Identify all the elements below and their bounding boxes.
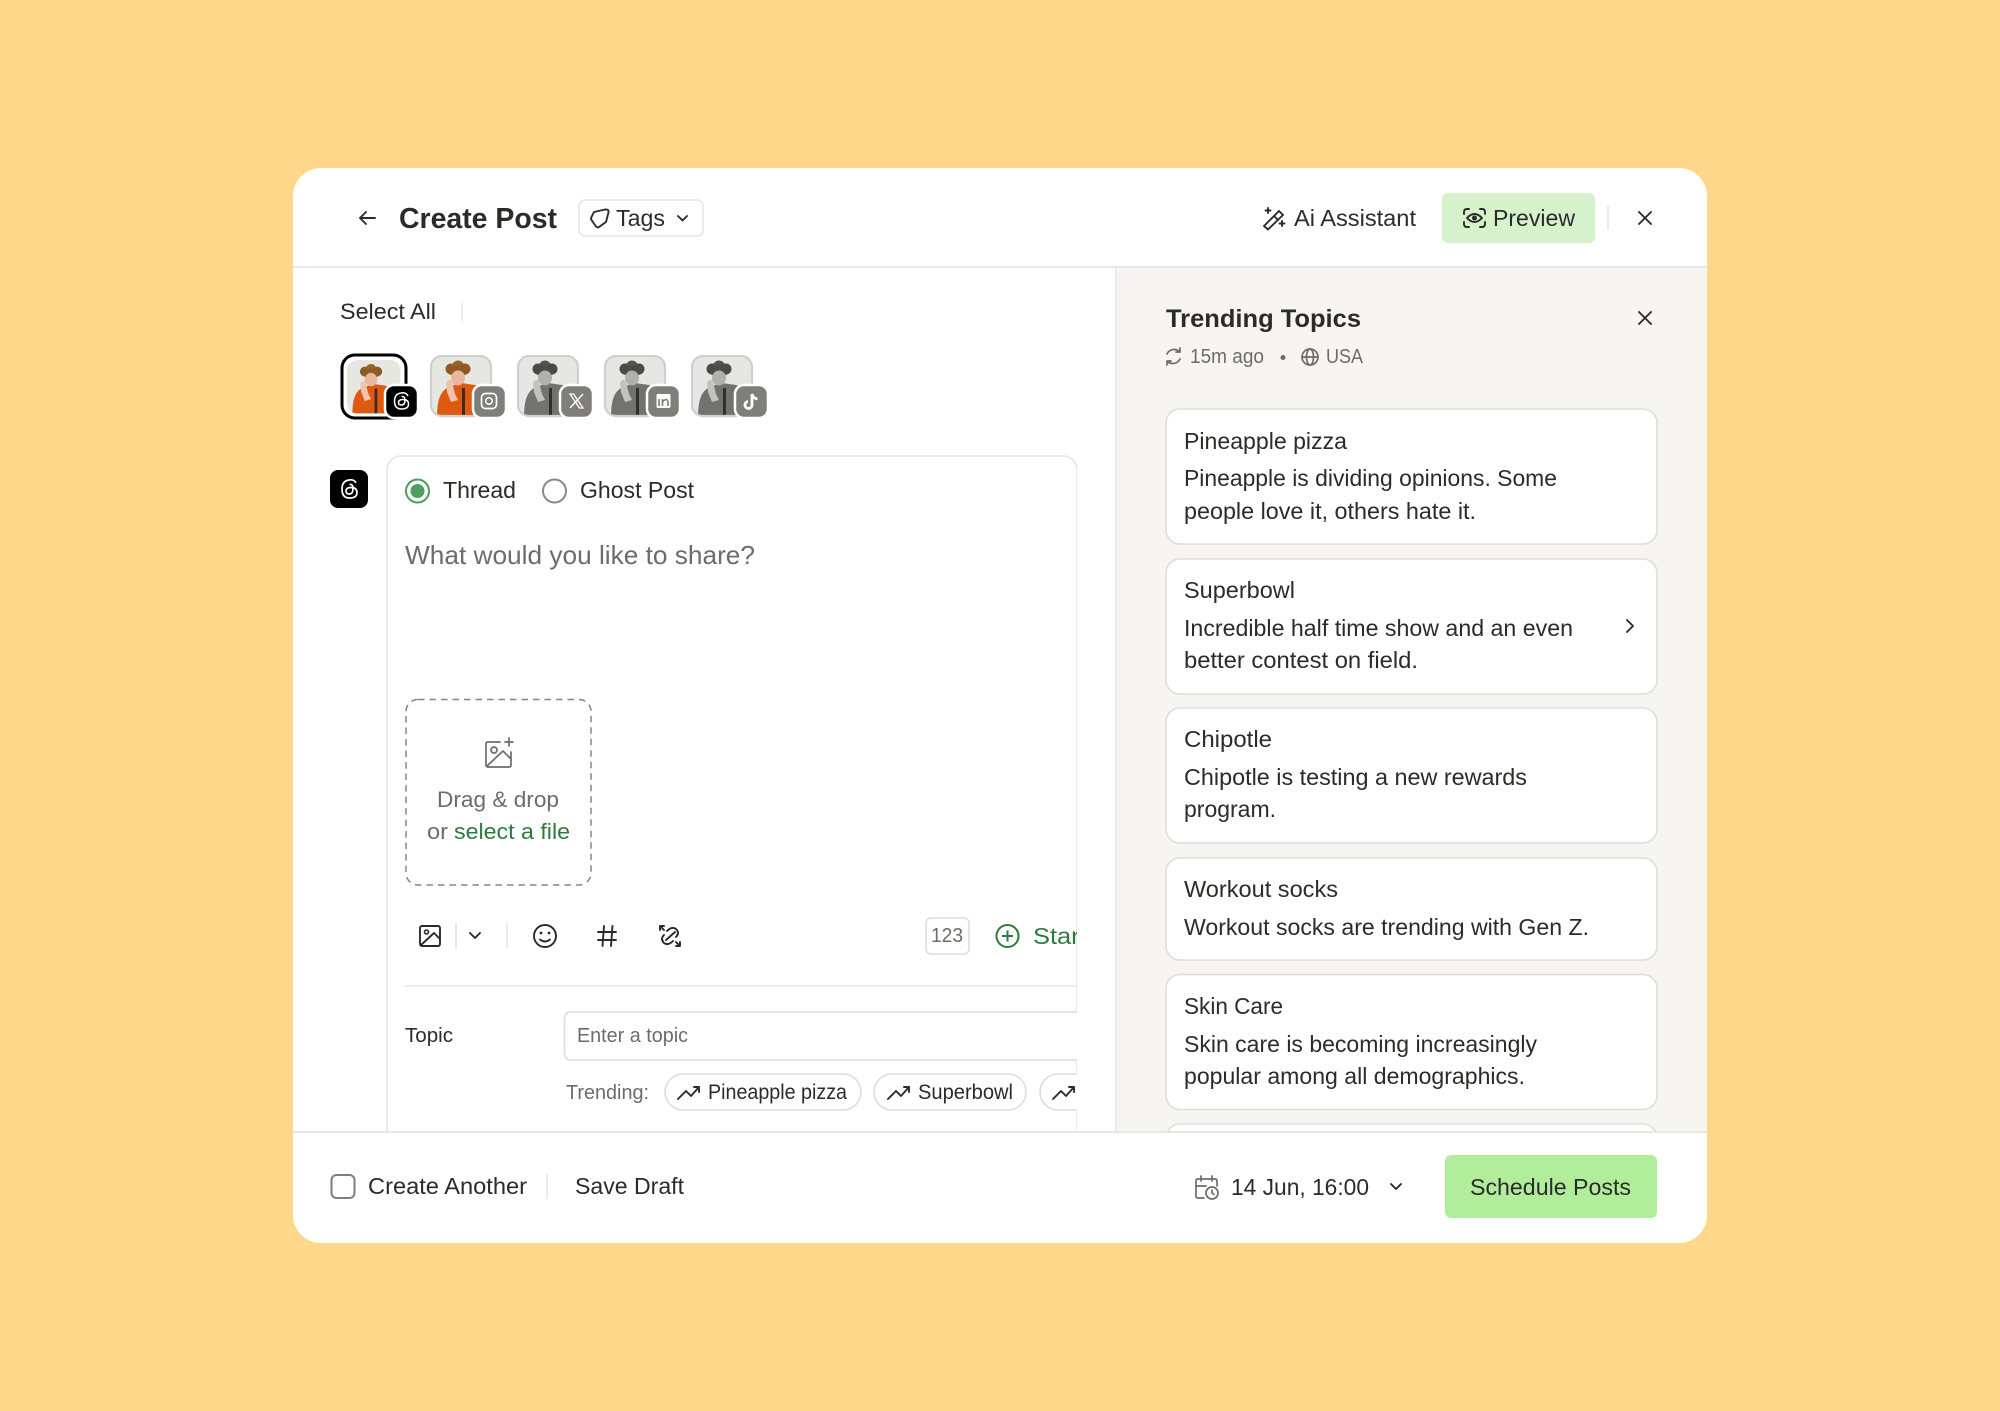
dropzone: select a file [454,819,570,844]
start thread button: Start a thread [1033,923,1187,949]
schedule posts button: Schedule Posts [1470,1174,1631,1200]
schedule posts button [1445,1155,1657,1218]
dropzone: or [427,819,448,844]
create another checkbox: Create Another [368,1173,527,1199]
pill: clipped [1039,1073,1077,1111]
tags dropdown: Tags [616,205,665,231]
select all: Select All [340,299,436,324]
title: Create Post [399,203,557,235]
ai assistant: Ai Assistant [1294,205,1417,231]
card: workout socks: Workout socks are trending with Gen Z. [1184,914,1589,940]
tags dropdown [579,200,703,236]
card: skin care: Skin Care [1184,993,1283,1019]
card: pineapple pizza: Pineapple pizza [1184,428,1347,454]
card: chipotle [1166,708,1657,843]
card: chipotle: Chipotle is testing a new rewards [1184,764,1527,790]
dropzone [406,700,591,885]
card: superbowl [1166,559,1657,694]
card: pineapple pizza: Pineapple is dividing opinions. Some [1184,465,1557,491]
icon: chevron [470,933,480,938]
topic field: Topic [405,1025,453,1047]
trending suggestions: Trending: [566,1082,649,1104]
save draft: Save Draft [575,1173,685,1199]
account: linkedin [605,356,680,418]
icon: close trending [1639,312,1651,324]
post type radio: thread [406,477,516,503]
schedule date [1196,1174,1401,1200]
panel: trending topics sidebar [1116,267,1707,1184]
post type radio: ghost post: Ghost Post [580,477,695,503]
preview button: Preview [1493,205,1575,231]
icon: back arrow [360,212,375,224]
card: superbowl: better contest on field. [1184,647,1418,673]
heading: trending topics: Trending Topics [1166,305,1361,333]
character counter: 123 [931,925,963,947]
card: skin care [1166,974,1657,1110]
pill: superbowl: Superbowl [918,1081,1013,1104]
card: workout socks [1166,858,1657,960]
icon: emoji [534,925,556,947]
trending suggestions [566,1074,1160,1110]
topic field [405,1012,1164,1060]
trending meta: USA [1326,346,1364,368]
icon: close modal [1639,212,1651,224]
post type radio: thread: Thread [443,477,516,503]
card: skin care: popular among all demographics. [1184,1063,1525,1089]
start thread button [996,924,1077,948]
card: clipped next topic [1167,1123,1656,1131]
card: chipotle: program. [1184,796,1276,822]
account: tiktok [692,356,768,418]
header [293,193,1707,268]
character counter [926,918,969,954]
pill: pineapple pizza [665,1074,861,1110]
card: skin care: Skin care is becoming increasingly [1184,1031,1537,1057]
account: instagram [431,356,506,418]
pill: superbowl [874,1074,1026,1110]
card: pineapple pizza: people love it, others hate it. [1184,498,1476,524]
icon: threads network [330,470,368,508]
preview button [1442,193,1595,243]
schedule date: 14 Jun, 16:00 [1231,1174,1369,1200]
footer [293,1131,1707,1243]
card: superbowl: Superbowl [1184,577,1295,603]
card: pineapple pizza [1166,409,1657,544]
placeholder prompt: What would you like to share? [405,540,755,570]
trending meta: 15m ago [1190,346,1264,368]
topic field: Enter a topic [577,1025,688,1047]
card: workout socks: Workout socks [1184,876,1338,902]
panel: composer [386,455,1077,1131]
toolbar [420,918,1187,954]
icon: image [420,926,440,946]
icon: hashtag [598,926,616,946]
dropzone: Drag & drop [437,787,559,812]
trending meta [1167,346,1364,368]
panel: create post modal [293,168,1707,1243]
icon: link [660,926,680,946]
card: superbowl: Incredible half time show and an even [1184,615,1573,641]
card: chipotle: Chipotle [1184,726,1272,752]
pill: pineapple pizza: Pineapple pizza [708,1081,847,1104]
account selector [342,355,768,418]
account: x [518,356,593,418]
account: threads selected [342,355,418,418]
